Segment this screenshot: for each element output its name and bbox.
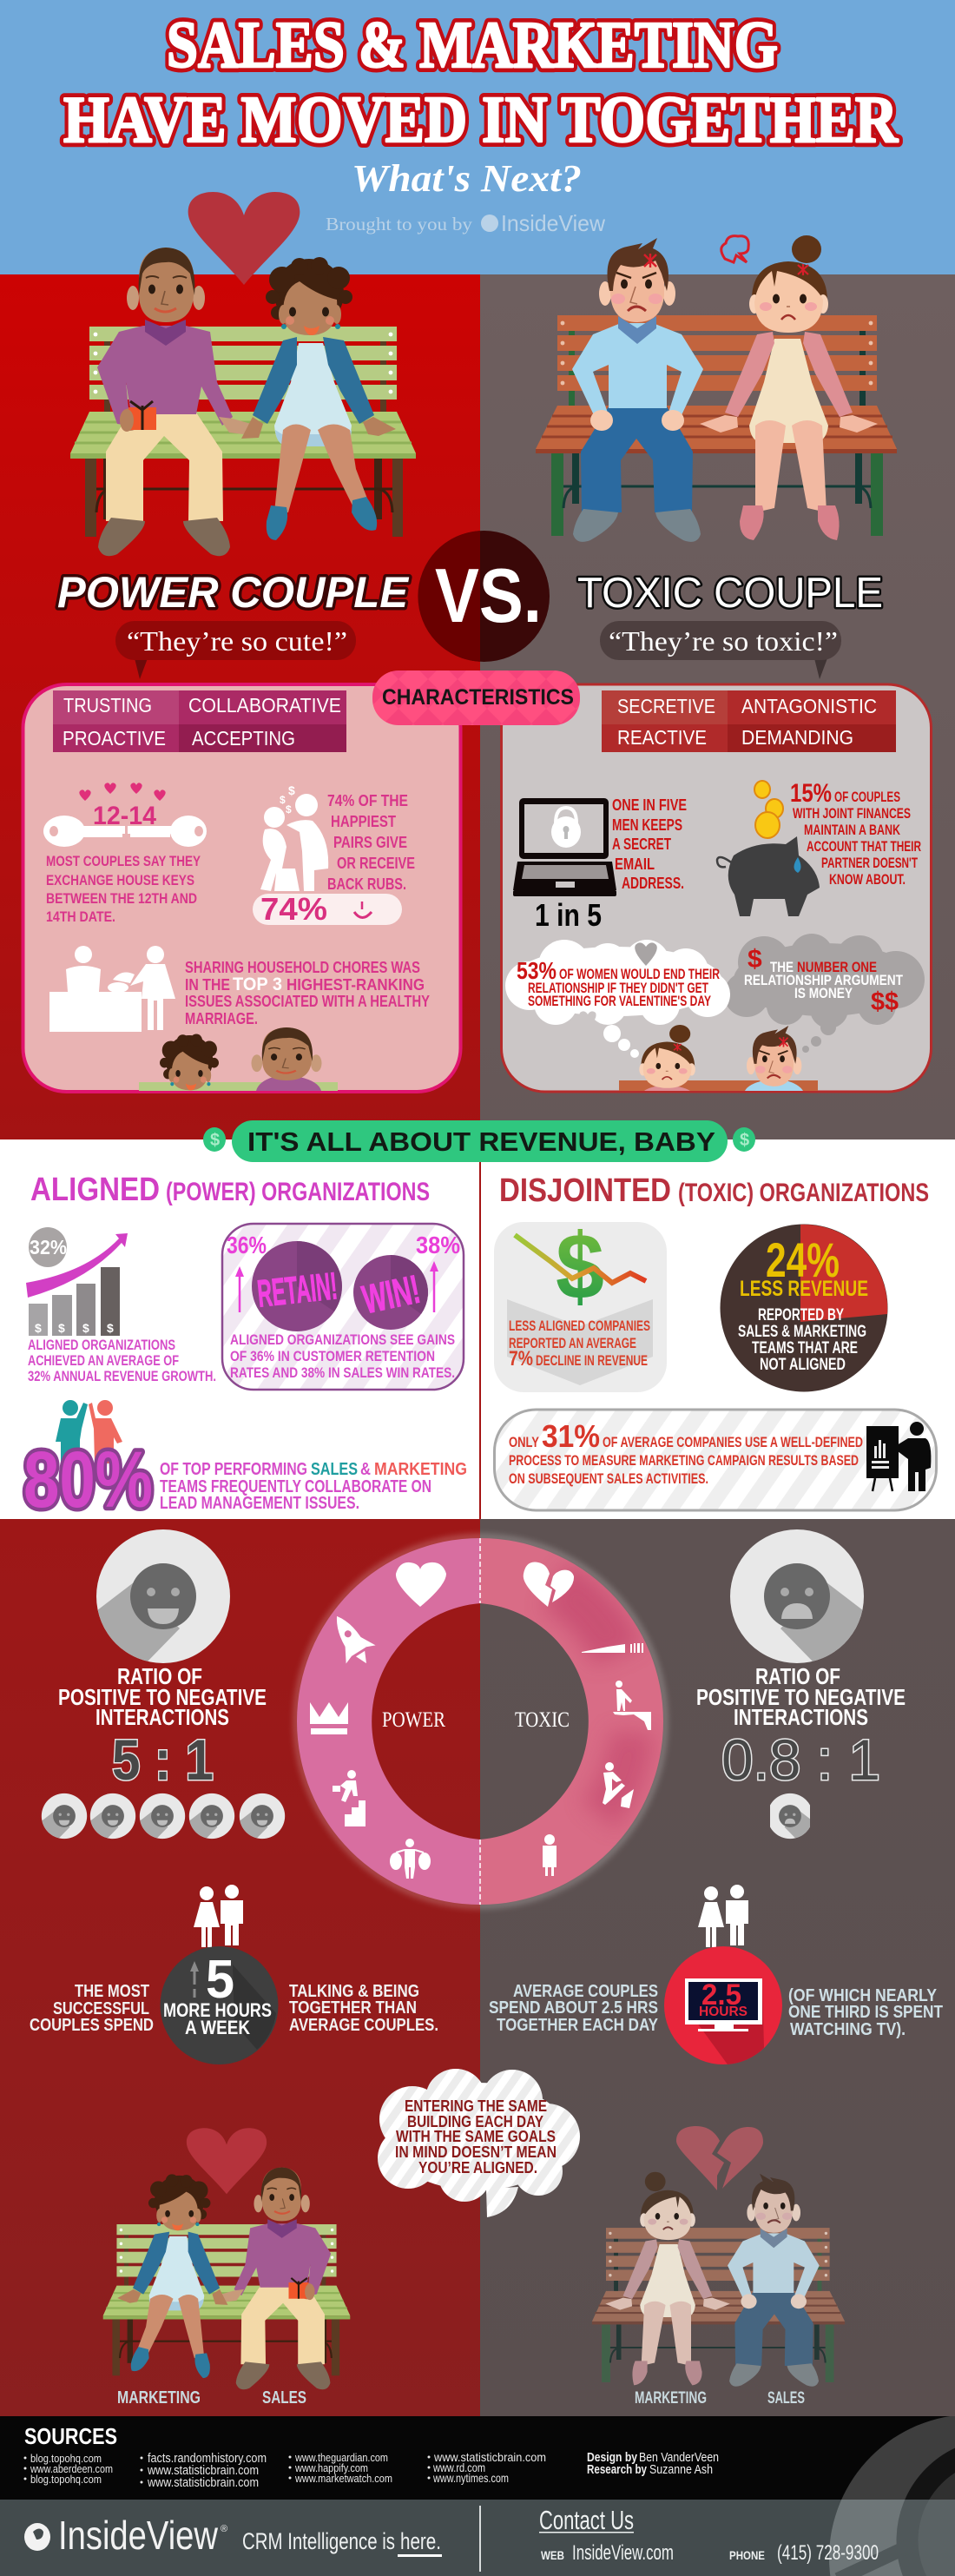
title: [63, 9, 899, 156]
callout: same building: ENTERING THE SAME: [405, 2097, 547, 2115]
text: talking and being: AVERAGE COUPLES.: [289, 2016, 438, 2035]
heading: disjointed organizations: [499, 1172, 929, 1209]
text: chores: [185, 959, 430, 1027]
text: chores: IN THE: [185, 976, 230, 994]
trait grid: power: ACCEPTING: [192, 727, 295, 750]
text: ratio right: INTERACTIONS: [734, 1704, 868, 1730]
text: valentine: SOMETHING FOR VALENTINE'S DAY: [528, 993, 711, 1009]
labels: marketing and sales left: SALES: [262, 2388, 306, 2408]
text: money argument: [744, 945, 903, 1016]
icon: hearts and keys: 12-14: [93, 802, 156, 830]
labels: marketing and sales left: MARKETING: [117, 2388, 201, 2408]
icon: back rub couple: $: [286, 803, 292, 816]
text: collaborate: LEAD MANAGEMENT ISSUES.: [160, 1494, 359, 1513]
thought cloud: money: [724, 934, 925, 1053]
text: average couples: TOGETHER EACH DAY: [497, 2016, 659, 2035]
text: joint finances: 15%: [790, 779, 832, 808]
speech bubble: so cute: “They’re so cute!”: [127, 625, 347, 657]
chart: power vs toxic ring: [297, 1537, 665, 1906]
text: annual growth: [28, 1337, 216, 1384]
speech bubble: so toxic: [600, 621, 841, 679]
stat circle: 24% less revenue: NOT ALIGNED: [760, 1356, 846, 1374]
panel: retain and win: ALIGNED ORGANIZATIONS SEE GAINS: [230, 1331, 455, 1348]
title: SALES & MARKETING: [167, 9, 778, 82]
sources column 4: www.statisticbrain.com: [433, 2450, 546, 2464]
text: money argument: THE: [770, 959, 794, 975]
text: keys: MOST COUPLES SAY THEY: [46, 853, 201, 869]
icon: falling dominoes: [582, 1643, 643, 1653]
trait grid: toxic: SECRETIVE: [617, 695, 715, 717]
callout: same building: YOU’RE ALIGNED.: [418, 2159, 537, 2176]
sources column 1: www.aberdeen.com: [30, 2462, 113, 2475]
contact us: PHONE: [729, 2548, 765, 2562]
toxic couple labelled: [592, 2172, 845, 2387]
panel: retain and win: 36%: [227, 1232, 267, 1258]
sources column 4: www.nytimes.com: [432, 2471, 509, 2485]
text: talking and being: [289, 1982, 438, 2035]
text: ratio right: [696, 1663, 906, 1730]
tagline: CRM Intelligence is: [242, 2528, 395, 2554]
icon: crying piggy bank: [717, 836, 820, 916]
icon: man at cliff edge: [613, 1681, 651, 1730]
text: ratio left: INTERACTIONS: [96, 1704, 229, 1730]
stat circle: 24% less revenue: LESS REVENUE: [740, 1277, 868, 1301]
heading: power couple: POWER COUPLE: [57, 568, 410, 617]
heading: aligned organizations: (POWER) ORGANIZATIONS: [166, 1178, 430, 1206]
text: collaborate: [160, 1460, 467, 1513]
text: back rubs: HAPPIEST: [331, 813, 396, 830]
trait grid: toxic: [602, 690, 896, 752]
stat circle: 24% less revenue: 24%: [766, 1232, 840, 1287]
badge: characteristics: [372, 670, 580, 725]
icon: man kicking papers: [603, 1762, 634, 1808]
text: keys: [46, 853, 201, 925]
stat pill: 74%: 74%: [260, 891, 327, 927]
panel: revenue decline: 7%: [509, 1347, 533, 1371]
panel: 31% campaign measurement: ON SUBSEQUENT SALES ACTIVITIES.: [509, 1470, 708, 1487]
icon: dollar sign with falling line: $: [556, 1213, 604, 1318]
stat circle: 2.5 hours tv: [664, 1946, 782, 2064]
footer magnifier watermark lower: [829, 2500, 955, 2576]
stat circle: 24% less revenue: [721, 1225, 887, 1391]
text: ratio left: [58, 1663, 267, 1730]
icon: partial sad face: [770, 1793, 810, 1840]
contact us: (415) 728-9300: [777, 2541, 879, 2565]
chart: revenue growth bars: $: [82, 1321, 89, 1335]
sources column 1: blog.topohq.com: [30, 2473, 102, 2486]
credits: Research by: [587, 2462, 648, 2477]
icon: climbing man: [333, 1770, 366, 1826]
icon: couple right: [698, 1885, 748, 1947]
labels: marketing and sales right: MARKETING: [635, 2389, 707, 2408]
sources heading: SOURCES: [24, 2423, 117, 2449]
background: white revenue section: [0, 1139, 955, 1519]
text: chores: TOP 3: [233, 974, 282, 994]
text: chores: HIGHEST-RANKING: [286, 976, 425, 994]
icon: left dollar coin: [203, 1127, 226, 1152]
stat: 0.8 to 1: 0.8 : 1: [721, 1727, 880, 1792]
background: power column top: [0, 274, 480, 1139]
sources column 2: www.statisticbrain.com: [147, 2475, 259, 2490]
text: back rubs: PAIRS GIVE: [333, 834, 407, 851]
text: average couples: [489, 1982, 659, 2035]
chart: win circle: WIN!: [359, 1266, 424, 1322]
text: back rubs: 74% OF THE: [327, 792, 408, 809]
sources column 3: www.theguardian.com: [294, 2451, 388, 2464]
icon: coins: [754, 781, 783, 838]
text: ratio left: POSITIVE TO NEGATIVE: [58, 1684, 267, 1710]
credits: Ben VanderVeen: [639, 2450, 719, 2465]
chart: revenue growth bars: $: [35, 1321, 42, 1335]
text: chores: MARRIAGE.: [185, 1010, 258, 1027]
icon: right dollar coin: [733, 1127, 755, 1152]
power couple on bench: [70, 248, 416, 556]
text: ratio right: POSITIVE TO NEGATIVE: [696, 1684, 906, 1710]
text: collaborate: OF TOP PERFORMING: [160, 1460, 307, 1479]
text: valentine: [517, 957, 720, 1009]
text: secret email: A SECRET: [612, 836, 671, 853]
text: talking and being: TOGETHER THAN: [289, 1998, 417, 2018]
panel: 31% campaign measurement: ONLY: [509, 1434, 539, 1450]
labels: marketing and sales right: SALES: [767, 2389, 805, 2408]
chart: retain circle: RETAIN!: [255, 1265, 339, 1316]
stat: 80%: 80%: [23, 1436, 153, 1524]
text: collaborate: SALES: [311, 1460, 358, 1479]
text: annual growth: ACHIEVED AN AVERAGE OF: [28, 1352, 179, 1369]
callout: same building: WITH THE SAME GOALS: [396, 2128, 556, 2145]
icon: crown: [310, 1702, 348, 1734]
icon: broken heart: [524, 1562, 574, 1607]
toxic couple on bench: [536, 235, 897, 542]
background: toxic column top: [480, 274, 955, 1139]
stat circle: 24% less revenue: REPORTED BY: [758, 1306, 844, 1324]
text: money argument: NUMBER ONE: [797, 959, 877, 975]
contact us: InsideView.com: [572, 2541, 674, 2565]
background: sky header: [0, 0, 955, 274]
labels: marketing and sales right: [635, 2389, 805, 2408]
VS badge: [418, 531, 550, 662]
text: valentine: 53%: [517, 957, 557, 984]
text: joint finances: KNOW ABOUT.: [829, 871, 906, 888]
ring label power: POWER: [382, 1708, 445, 1732]
icon: broken hearts: [579, 942, 657, 1028]
chart: retain circle: [252, 1241, 342, 1331]
panel: retain and win: RATES AND 38% IN SALES WIN RATES.: [230, 1364, 455, 1381]
arrows: gains: [235, 1261, 438, 1312]
thought cloud: valentine: [505, 940, 730, 1058]
text: chores: SHARING HOUSEHOLD CHORES WAS: [185, 959, 420, 976]
footer magnifier watermark upper: [841, 2416, 955, 2500]
text: most successful: COUPLES SPEND: [30, 2016, 154, 2035]
panel: 31% campaign measurement: 31%: [542, 1418, 600, 1454]
footer: sources band: [0, 2416, 955, 2500]
icon: dollar sign with falling line: [515, 1213, 646, 1318]
stat circle: 5 more hours: 5: [206, 1950, 234, 2010]
panel: retain and win: OF 36% IN CUSTOMER RETENTION: [230, 1348, 435, 1364]
text: money argument: $: [748, 945, 762, 974]
power couple peeking: [139, 1027, 338, 1091]
icon: heart: [396, 1562, 446, 1607]
text: secret email: [612, 796, 687, 892]
chart: revenue growth bars: $: [107, 1321, 114, 1335]
stat circle: 2.5 hours tv: HOURS: [699, 2005, 748, 2019]
text: joint finances: OF COUPLES: [834, 789, 900, 805]
text: most successful: [30, 1982, 154, 2035]
stat circle: 5 more hours: [160, 1946, 278, 2064]
text: valentine: RELATIONSHIP IF THEY DIDN'T GET: [528, 980, 708, 996]
contact us: Contact Us: [539, 2505, 634, 2535]
contact us: WEB: [541, 2548, 564, 2562]
tagline: here.: [400, 2528, 441, 2554]
icon: back rub couple: $: [280, 794, 286, 806]
text: secret email: MEN KEEPS: [612, 816, 682, 834]
text: ratio left: RATIO OF: [117, 1663, 202, 1689]
text: back rubs: OR RECEIVE: [337, 855, 415, 872]
chart: revenue growth bars: $: [58, 1321, 65, 1335]
trait grid: toxic: REACTIVE: [617, 726, 707, 749]
credits: [587, 2450, 719, 2477]
chart: revenue growth bars: 32%: [30, 1236, 67, 1258]
badge: characteristics: CHARACTERISTICS: [382, 685, 574, 710]
sources column 4: www.rd.com: [432, 2460, 485, 2474]
text: secret email: EMAIL: [615, 855, 655, 873]
text: ratio right: RATIO OF: [755, 1663, 840, 1689]
text: joint finances: MAINTAIN A BANK: [804, 822, 901, 838]
power couple labelled: [103, 2168, 350, 2389]
trait grid: toxic: ANTAGONISTIC: [741, 695, 877, 717]
callout: same building: BUILDING EACH DAY: [407, 2113, 543, 2130]
text: keys: BETWEEN THE 12TH AND: [46, 890, 197, 907]
panel: 31% campaign measurement: OF AVERAGE COMPANIES USE A WELL-DEFINED: [603, 1434, 863, 1450]
text: keys: EXCHANGE HOUSE KEYS: [46, 872, 194, 888]
heading: aligned organizations: ALIGNED: [30, 1172, 160, 1208]
icon: presenter: [866, 1422, 931, 1491]
icon row: five happy faces: [39, 1793, 285, 1843]
background: power column lower: [0, 1519, 480, 2416]
stat pill: 74%: [253, 891, 402, 927]
heading: toxic couple: TOXIC COUPLE: [577, 570, 883, 617]
stat circle: 2.5 hours tv: 2.5: [701, 1978, 741, 2011]
icon: laptop with padlock: [513, 798, 616, 896]
sources column 4: [427, 2450, 546, 2485]
panel: retain and win: 38%: [416, 1232, 460, 1258]
text: annual growth: ALIGNED ORGANIZATIONS: [28, 1337, 175, 1353]
icon: back rub couple: $: [288, 783, 295, 797]
icon: heart lower left: [187, 2128, 267, 2194]
icon: back rub couple: [260, 783, 328, 891]
text: back rubs: [327, 792, 415, 893]
text: watching tv: (OF WHICH NEARLY: [788, 1986, 938, 2005]
brought to you by logo: [326, 210, 605, 236]
icon: sales and marketing high five: [56, 1400, 122, 1463]
sources column 3: www.marketwatch.com: [294, 2472, 392, 2485]
footer: contact band: [0, 2500, 955, 2576]
panel: revenue decline: REPORTED AN AVERAGE: [509, 1335, 636, 1351]
brought to you by logo: InsideView: [501, 210, 605, 236]
stat: 1 in 5: 1 in 5: [535, 897, 602, 933]
icon: hearts and keys: [43, 783, 207, 847]
stat circle: 24% less revenue: SALES & MARKETING: [738, 1323, 866, 1341]
stat circle: 5 more hours: MORE HOURS: [163, 1999, 272, 2021]
contact us: [539, 2505, 879, 2565]
stat: 5 to 1: 5 : 1: [112, 1727, 214, 1792]
text: money argument: $$: [871, 987, 899, 1016]
text: secret email: ADDRESS.: [622, 875, 684, 892]
ring label toxic: TOXIC: [515, 1708, 570, 1732]
sources column 3: [288, 2451, 392, 2485]
title: SALES & MARKETING: [167, 9, 778, 82]
banner: about revenue: [203, 1120, 755, 1162]
callout: same building: [378, 2069, 580, 2217]
stat circle: 24% less revenue: TEAMS THAT ARE: [752, 1339, 858, 1357]
sources column 2: [141, 2451, 267, 2490]
sources column 2: facts.randomhistory.com: [148, 2451, 267, 2466]
text: chores: ISSUES ASSOCIATED WITH A HEALTHY: [185, 993, 430, 1010]
chart: revenue growth bars: [26, 1227, 128, 1336]
panel: toxic characteristics: [502, 684, 931, 1092]
panel: 31% campaign measurement: [495, 1410, 936, 1510]
panel: power characteristics: [23, 684, 460, 1092]
sources column 2: www.statisticbrain.com: [147, 2463, 259, 2478]
icon: big happy face: [89, 1529, 230, 1674]
divider: white section centre: [479, 1155, 481, 1519]
speech bubble: so toxic: “They’re so toxic!”: [609, 625, 838, 657]
icon: household chores: [49, 946, 175, 1032]
icon: couple left: [194, 1885, 243, 1947]
VS badge: VS.: [435, 552, 542, 638]
trait grid: power: TRUSTING: [63, 694, 152, 717]
text: keys: 14TH DATE.: [46, 908, 115, 925]
toxic couple peeking: [619, 1025, 818, 1091]
text: collaborate: TEAMS FREQUENTLY COLLABORATE ON: [160, 1477, 431, 1496]
text: average couples: SPEND ABOUT 2.5 HRS: [489, 1998, 658, 2018]
text: collaborate: MARKETING: [374, 1460, 467, 1479]
text: money argument: IS MONEY: [794, 985, 853, 1001]
logo: insideview: InsideView: [58, 2513, 219, 2558]
text: watching tv: WATCHING TV).: [790, 2020, 906, 2039]
text: average couples: AVERAGE COUPLES: [513, 1982, 658, 2001]
panel: revenue decline: DECLINE IN REVENUE: [536, 1352, 648, 1369]
background: toxic column lower: [480, 1519, 955, 2416]
icon: left dollar coin: $: [210, 1131, 220, 1150]
footer divider: [479, 2506, 481, 2572]
text: valentine: OF WOMEN WOULD END THEIR: [559, 966, 720, 982]
trait grid: power: [53, 690, 346, 752]
credits: Suzanne Ash: [649, 2462, 713, 2477]
text: back rubs: BACK RUBS.: [327, 875, 406, 893]
labels: marketing and sales left: [117, 2388, 306, 2408]
sources column 3: www.happify.com: [294, 2461, 368, 2474]
icon: man with money bags: [390, 1839, 431, 1879]
icon: big sad face: [730, 1529, 871, 1674]
text: joint finances: [790, 779, 921, 888]
logo: insideview: ®: [221, 2524, 227, 2534]
callout: same building: IN MIND DOESN’T MEAN: [395, 2143, 557, 2161]
credits: Design by: [587, 2450, 638, 2465]
heading: disjointed organizations: DISJOINTED: [499, 1172, 671, 1209]
icon: heart top: [188, 192, 300, 285]
text: secret email: ONE IN FIVE: [612, 796, 687, 814]
text: joint finances: WITH JOINT FINANCES: [793, 805, 911, 822]
text: most successful: THE MOST: [75, 1982, 149, 2001]
icon: standing man: [543, 1834, 557, 1876]
trait grid: power: PROACTIVE: [63, 727, 166, 750]
heading: aligned organizations: [30, 1172, 430, 1208]
panel: revenue decline: LESS ALIGNED COMPANIES: [509, 1318, 650, 1334]
banner: about revenue: IT'S ALL ABOUT REVENUE, BABY: [247, 1126, 715, 1157]
text: most successful: SUCCESSFUL: [53, 1999, 149, 2018]
icon: rocket: [322, 1607, 381, 1673]
subtitle: What's Next?: [352, 157, 582, 200]
panel: revenue decline: [494, 1213, 667, 1392]
text: collaborate: &: [360, 1460, 371, 1479]
chart: win circle: [353, 1255, 428, 1330]
text: watching tv: [788, 1986, 943, 2039]
panel: retain and win: [222, 1224, 464, 1390]
sources column 1: blog.topohq.com: [30, 2452, 102, 2465]
sources column 1: [24, 2452, 113, 2486]
icon: anger puff: [721, 236, 748, 262]
icon: right dollar coin: $: [740, 1131, 749, 1150]
text: annual growth: 32% ANNUAL REVENUE GROWTH.: [28, 1368, 216, 1384]
trait grid: power: COLLABORATIVE: [188, 694, 341, 717]
brought to you by logo: Brought to you by: [326, 214, 473, 234]
speech bubble: so cute: [115, 621, 356, 679]
stat circle: 5 more hours: A WEEK: [185, 2017, 250, 2038]
icon: broken heart lower right: [676, 2126, 763, 2190]
text: talking and being: TALKING & BEING: [289, 1982, 419, 2001]
text: money argument: RELATIONSHIP ARGUMENT: [744, 972, 903, 988]
trait grid: toxic: DEMANDING: [741, 726, 853, 749]
